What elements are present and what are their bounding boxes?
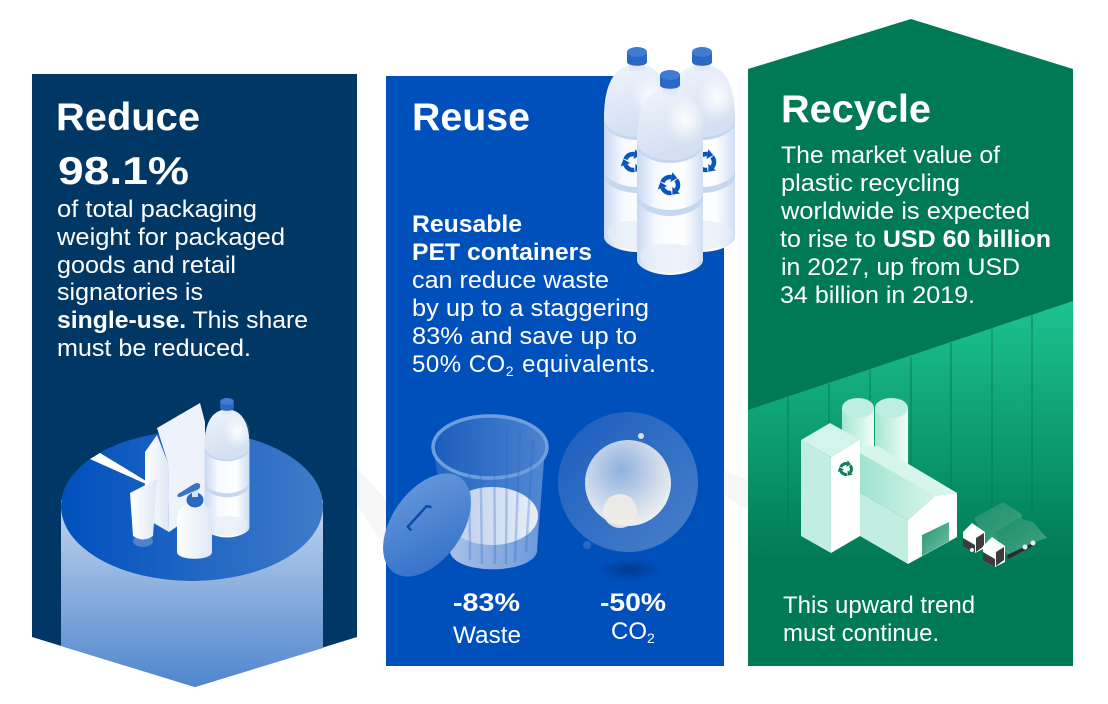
Reuse text block: 2 [506,363,514,379]
CO2 stat: CO [611,618,647,645]
icon: trash can [365,416,547,593]
CO2 stat: -50% [600,589,666,617]
Recycle panel background [748,19,1073,666]
Reuse text block: Reusable [412,211,522,238]
Reuse heading: Reuse [412,96,530,139]
cylinder top disc [61,431,323,581]
Recycle text block [780,142,1051,309]
cylinder with packaging [61,398,323,687]
Reduce text block: goods and retail [57,252,236,279]
Reduce text block: single-use. This share [57,307,308,334]
Reduce statistic: 98.1% [58,150,189,193]
Recycle closing text [783,592,975,647]
icon: tube [130,479,157,547]
icon: pump dispenser [177,483,212,559]
icon: carton [145,403,205,532]
Reduce heading: Reduce [56,96,200,139]
Recycle text block: in 2027, up from USD [781,254,1020,281]
Recycle heading: Recycle [781,88,931,131]
Reduce text block: weight for packaged [56,224,285,251]
Recycle text block: 34 billion in 2019. [780,282,975,309]
CO2 stat [600,589,666,646]
Reuse text block: 50% CO [412,351,506,378]
Reuse text block: equivalents. [515,351,656,378]
icon: CO2 bubble [558,412,698,582]
Reduce text block: of total packaging [57,196,257,223]
silos [842,398,908,480]
Recycle text block: worldwide is expected [780,198,1030,225]
Reduce text block: signatories is [57,279,203,306]
icon: recycling plant [801,398,957,564]
faint shadow between panels [357,468,748,548]
Reuse panel background [386,76,724,666]
CO2 stat: 2 [647,630,655,646]
back left bottle [604,47,672,252]
Reuse text block: PET containers [412,239,592,266]
waste stat: -83% [453,589,520,617]
Reuse text block: by up to a staggering [412,295,649,322]
Reuse text block: 83% and save up to [412,323,637,350]
hall [860,446,957,564]
Reduce panel background [32,74,357,687]
icon: bottle [205,398,251,537]
waste stat [453,589,521,649]
Recycle text block: to rise to USD 60 billion [780,226,1051,253]
Reuse text block: can reduce waste [412,267,609,294]
icon: three bottles [604,47,737,275]
panel: Recycle [748,19,1073,666]
Reduce text block: must be reduced. [57,335,251,362]
Recycle wall [748,301,1073,560]
panel: Reuse [365,47,737,666]
truck front [983,518,1047,567]
panel: Reduce [32,74,357,687]
Reuse text block [412,211,656,379]
Reduce text block [56,196,308,362]
cylinder body [61,500,323,687]
back right bottle [669,47,737,252]
Recycle text block: The market value of [781,142,1000,169]
Recycle closing text: This upward trend [783,592,975,619]
Recycle text block: plastic recycling [781,170,960,197]
tower [801,423,860,553]
front bottle [637,70,705,275]
truck rear [963,502,1022,553]
white slice [90,453,146,484]
icon: garbage trucks [963,502,1047,567]
Recycle closing text: must continue. [783,620,939,647]
waste stat: Waste [453,622,521,649]
